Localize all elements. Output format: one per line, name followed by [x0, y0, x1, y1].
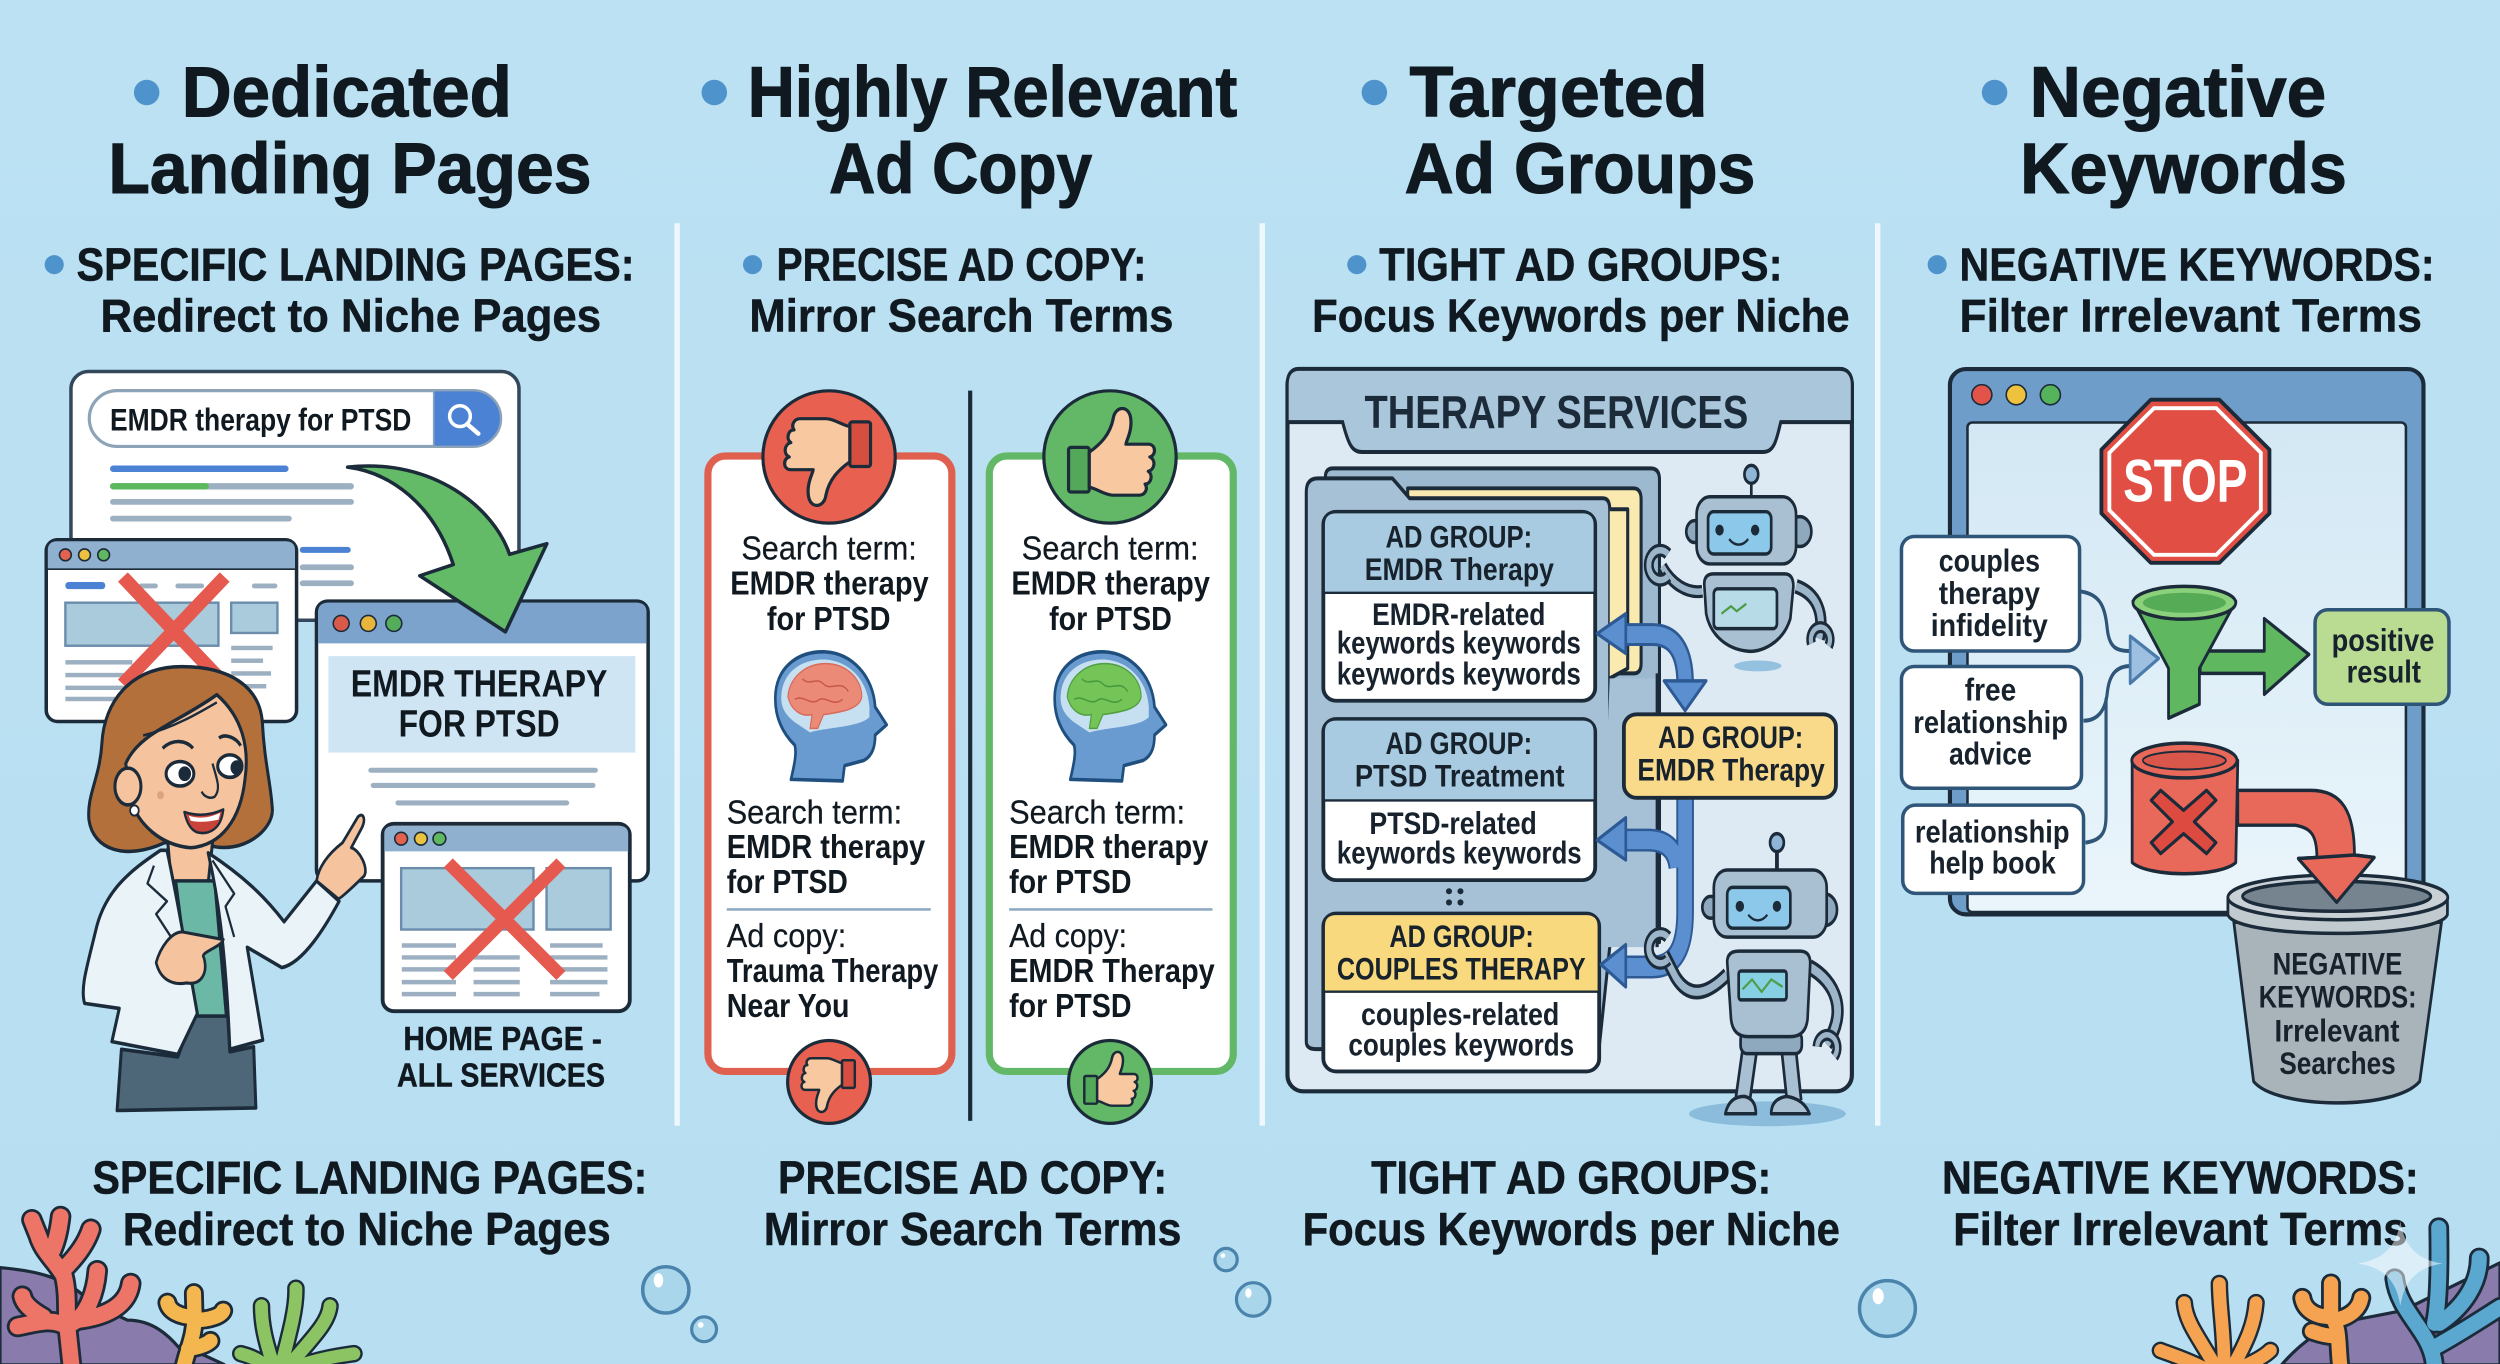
- subheading: precise ad copy: [743, 239, 1173, 342]
- heading: Dedicated Landing Pages: Landing Pages: [108, 129, 592, 209]
- subheading: tight ad groups: Focus Keywords per Niche: [1312, 290, 1849, 342]
- text: bad search term: [730, 531, 929, 638]
- heading: Dedicated Landing Pages: Dedicated: [182, 52, 512, 132]
- heading: Highly Relevant Ad Copy: Ad Copy: [829, 129, 1092, 209]
- text: good search term: for PTSD: [1049, 601, 1172, 638]
- keyword box: free relationship advice: advice: [1949, 736, 2032, 772]
- bucket label: KEYWORDS:: [2259, 979, 2417, 1015]
- label: EMDR therapy ad group: EMDR Therapy: [1637, 751, 1825, 787]
- subheading: negative keywords: Filter Irrelevant Terms: [1960, 290, 2422, 342]
- text: good search term: Search term:: [1022, 531, 1199, 568]
- card: EMDR therapy ad group: EMDR Therapy: [1365, 551, 1554, 587]
- subheading: negative keywords: [1928, 239, 2435, 342]
- card: PTSD treatment ad group: [1323, 719, 1595, 880]
- illustration: upper robot: [1649, 465, 1830, 671]
- landing page window: EMDR therapy for PTSD: [316, 601, 648, 881]
- text: bad ad comparison: EMDR therapy: [727, 829, 926, 866]
- footer caption: negative keywords: Filter Irrelevant Terms: [1953, 1203, 2408, 1255]
- decoration: bubbles: [643, 1248, 1915, 1342]
- card: couples therapy ad group: [1323, 914, 1599, 1071]
- icon: stop sign: STOP: [2123, 446, 2247, 514]
- text: good ad comparison: Ad copy:: [1009, 918, 1127, 955]
- card: EMDR therapy ad group: [1323, 512, 1595, 701]
- footer caption: specific landing pages: SPECIFIC LANDING PAGES:: [92, 1151, 647, 1203]
- card: couples therapy ad group: couples-related: [1361, 996, 1559, 1032]
- subheading: tight ad groups: [1312, 239, 1849, 342]
- bucket label: Irrelevant: [2275, 1013, 2400, 1049]
- text: good ad comparison: for PTSD: [1009, 988, 1132, 1025]
- icon: thumbs up small: [1069, 1040, 1151, 1123]
- browser window: [1950, 369, 2423, 914]
- icon: thumbs down small: [788, 1040, 871, 1123]
- text: bad ad comparison: [727, 795, 939, 1025]
- ellipsis dots: [1446, 888, 1463, 905]
- subheading: negative keywords: NEGATIVE KEYWORDS:: [1960, 239, 2435, 291]
- label: positive result: positive: [2332, 622, 2434, 658]
- arrows: blue routing arrows: [1597, 614, 1706, 987]
- divider between bad and good ads: [968, 391, 972, 1121]
- landing page window: EMDR therapy for PTSD: EMDR THERAPY: [351, 663, 607, 706]
- subheading: precise ad copy: Mirror Search Terms: [749, 290, 1173, 342]
- keyword box: relationship help book: help book: [1929, 845, 2056, 881]
- card: PTSD treatment ad group: PTSD-related: [1369, 805, 1537, 841]
- text: bad search term: Search term:: [741, 531, 917, 568]
- illustration: therapist pointing: [83, 667, 365, 1110]
- home page window with red cross: [383, 824, 630, 1011]
- text: bad ad comparison: Search term:: [727, 795, 902, 832]
- keyword box: free relationship advice: relationship: [1913, 704, 2068, 740]
- arrow: curved green redirect: [348, 466, 547, 632]
- decoration: bottom-left coral reef: [0, 1217, 354, 1364]
- subheading: specific landing pages: Redirect to Niche Pages: [100, 290, 601, 342]
- card: EMDR therapy ad group: keywords keywords: [1337, 655, 1581, 691]
- bucket label: NEGATIVE: [2273, 946, 2402, 982]
- text: good search term: EMDR therapy: [1011, 566, 1210, 603]
- keyword box: free relationship advice: free: [1965, 672, 2016, 708]
- wrong page window with red cross: [46, 540, 297, 721]
- heading: Dedicated Landing Pages: [108, 52, 592, 209]
- heading: Negative Keywords: Keywords: [2020, 129, 2347, 209]
- text: good search term: [1011, 531, 1210, 638]
- panel: highly relevant ad copy: [702, 52, 1237, 1255]
- illustration: lower robot: [1649, 834, 1846, 1126]
- panel: dedicated landing pages: [45, 52, 648, 1255]
- card: PTSD treatment ad group: PTSD Treatment: [1355, 757, 1565, 793]
- text: bad search term: for PTSD: [767, 601, 890, 638]
- keyword box: couples therapy infidelity: therapy: [1939, 575, 2040, 611]
- icon: thumbs up large: [1044, 391, 1176, 523]
- search results window: EMDR therapy for PTSD: [110, 401, 411, 437]
- icon: head with green brain: [1055, 652, 1166, 781]
- footer caption: precise ad copy: Mirror Search Terms: [764, 1203, 1181, 1255]
- footer caption: tight ad groups: [1303, 1151, 1840, 1255]
- heading: Targeted Ad Groups: Targeted: [1409, 52, 1708, 132]
- keyword box: couples therapy infidelity: couples: [1939, 543, 2040, 579]
- icon: head with red brain: [775, 652, 887, 781]
- label: positive result: result: [2347, 653, 2421, 689]
- footer caption: precise ad copy: [764, 1151, 1181, 1255]
- icon: stop sign: [2101, 400, 2269, 563]
- text: bad ad comparison: Ad copy:: [727, 918, 846, 955]
- card: good example: [989, 391, 1233, 1123]
- keyword box: relationship help book: relationship: [1915, 814, 2070, 850]
- keyword box: couples therapy infidelity: infidelity: [1931, 607, 2048, 643]
- footer caption: negative keywords: NEGATIVE KEYWORDS:: [1942, 1151, 2419, 1203]
- card: EMDR therapy ad group: keywords keywords: [1337, 625, 1581, 661]
- card: bad example: [708, 391, 952, 1123]
- label: EMDR therapy ad group: [1624, 714, 1836, 798]
- subheading: specific landing pages: SPECIFIC LANDING PAGES:: [77, 239, 635, 291]
- heading: Negative Keywords: [1982, 52, 2347, 209]
- label: positive result: [2315, 610, 2449, 704]
- card: couples therapy ad group: COUPLES THERAPY: [1337, 950, 1586, 986]
- footer caption: tight ad groups: Focus Keywords per Niche: [1303, 1203, 1840, 1255]
- text: good ad comparison: for PTSD: [1009, 864, 1132, 901]
- text: bad search term: EMDR therapy: [730, 566, 929, 603]
- keyword box: free relationship advice: [1901, 666, 2081, 788]
- icon: red rejected cylinder and arrow: [2132, 743, 2374, 902]
- heading: Negative Keywords: Negative: [2030, 52, 2326, 132]
- card: couples therapy ad group: AD GROUP:: [1389, 918, 1534, 954]
- caption: home page all services: HOME PAGE -: [403, 1021, 602, 1058]
- icon: thumbs down large: [763, 391, 895, 523]
- card: EMDR therapy ad group: AD GROUP:: [1386, 519, 1532, 555]
- card: couples therapy ad group: couples keywords: [1348, 1026, 1574, 1062]
- landing page window: EMDR therapy for PTSD: FOR PTSD: [399, 703, 560, 746]
- card: PTSD treatment ad group: keywords keywords: [1337, 835, 1582, 871]
- keyword box: relationship help book: [1903, 805, 2084, 893]
- icon: filter funnel and arrows: [2130, 586, 2309, 718]
- card: PTSD treatment ad group: AD GROUP:: [1386, 725, 1532, 761]
- panel: negative keywords: [1901, 52, 2449, 1255]
- panel: targeted ad groups: [1287, 52, 1852, 1255]
- footer caption: specific landing pages: [92, 1151, 647, 1255]
- bucket label: [2259, 946, 2417, 1081]
- subheading: specific landing pages: [45, 239, 635, 342]
- text: bad ad comparison: for PTSD: [727, 864, 848, 901]
- footer caption: tight ad groups: TIGHT AD GROUPS:: [1371, 1151, 1771, 1203]
- text: bad ad comparison: Trauma Therapy: [727, 953, 939, 990]
- footer caption: specific landing pages: Redirect to Niche Pages: [123, 1203, 611, 1255]
- text: good ad comparison: [1009, 795, 1215, 1025]
- heading: Highly Relevant Ad Copy: [702, 52, 1237, 209]
- text: good ad comparison: Search term:: [1009, 795, 1185, 832]
- label: EMDR therapy ad group: AD GROUP:: [1658, 719, 1803, 755]
- therapy services folder window: [1287, 369, 1852, 1091]
- caption: home page all services: ALL SERVICES: [397, 1058, 605, 1095]
- text: good ad comparison: EMDR Therapy: [1009, 953, 1215, 990]
- caption: home page all services: [397, 1021, 605, 1095]
- subheading: tight ad groups: TIGHT AD GROUPS:: [1379, 239, 1783, 291]
- card: EMDR therapy ad group: EMDR-related: [1372, 596, 1545, 632]
- footer caption: negative keywords: [1942, 1151, 2419, 1255]
- connector lines from keywords to filter: [2080, 591, 2131, 843]
- heading: Targeted Ad Groups: [1362, 52, 1755, 209]
- icon: negative keywords bucket: [2228, 855, 2448, 1103]
- heading: Highly Relevant Ad Copy: Highly Relevant: [748, 52, 1237, 132]
- keyword box: couples therapy infidelity: [1901, 537, 2080, 651]
- stacked folders: [1306, 468, 1659, 1049]
- search results window: [71, 371, 519, 620]
- therapy services folder window: THERAPY SERVICES: [1364, 386, 1748, 438]
- text: good ad comparison: EMDR therapy: [1009, 829, 1209, 866]
- text: bad ad comparison: Near You: [727, 988, 849, 1025]
- footer caption: precise ad copy: PRECISE AD COPY:: [778, 1151, 1167, 1203]
- subheading: precise ad copy: PRECISE AD COPY:: [776, 239, 1146, 291]
- decoration: bottom-right coral reef: [2160, 1221, 2500, 1364]
- heading: Targeted Ad Groups: Ad Groups: [1405, 129, 1755, 209]
- bucket label: Searches: [2279, 1045, 2396, 1081]
